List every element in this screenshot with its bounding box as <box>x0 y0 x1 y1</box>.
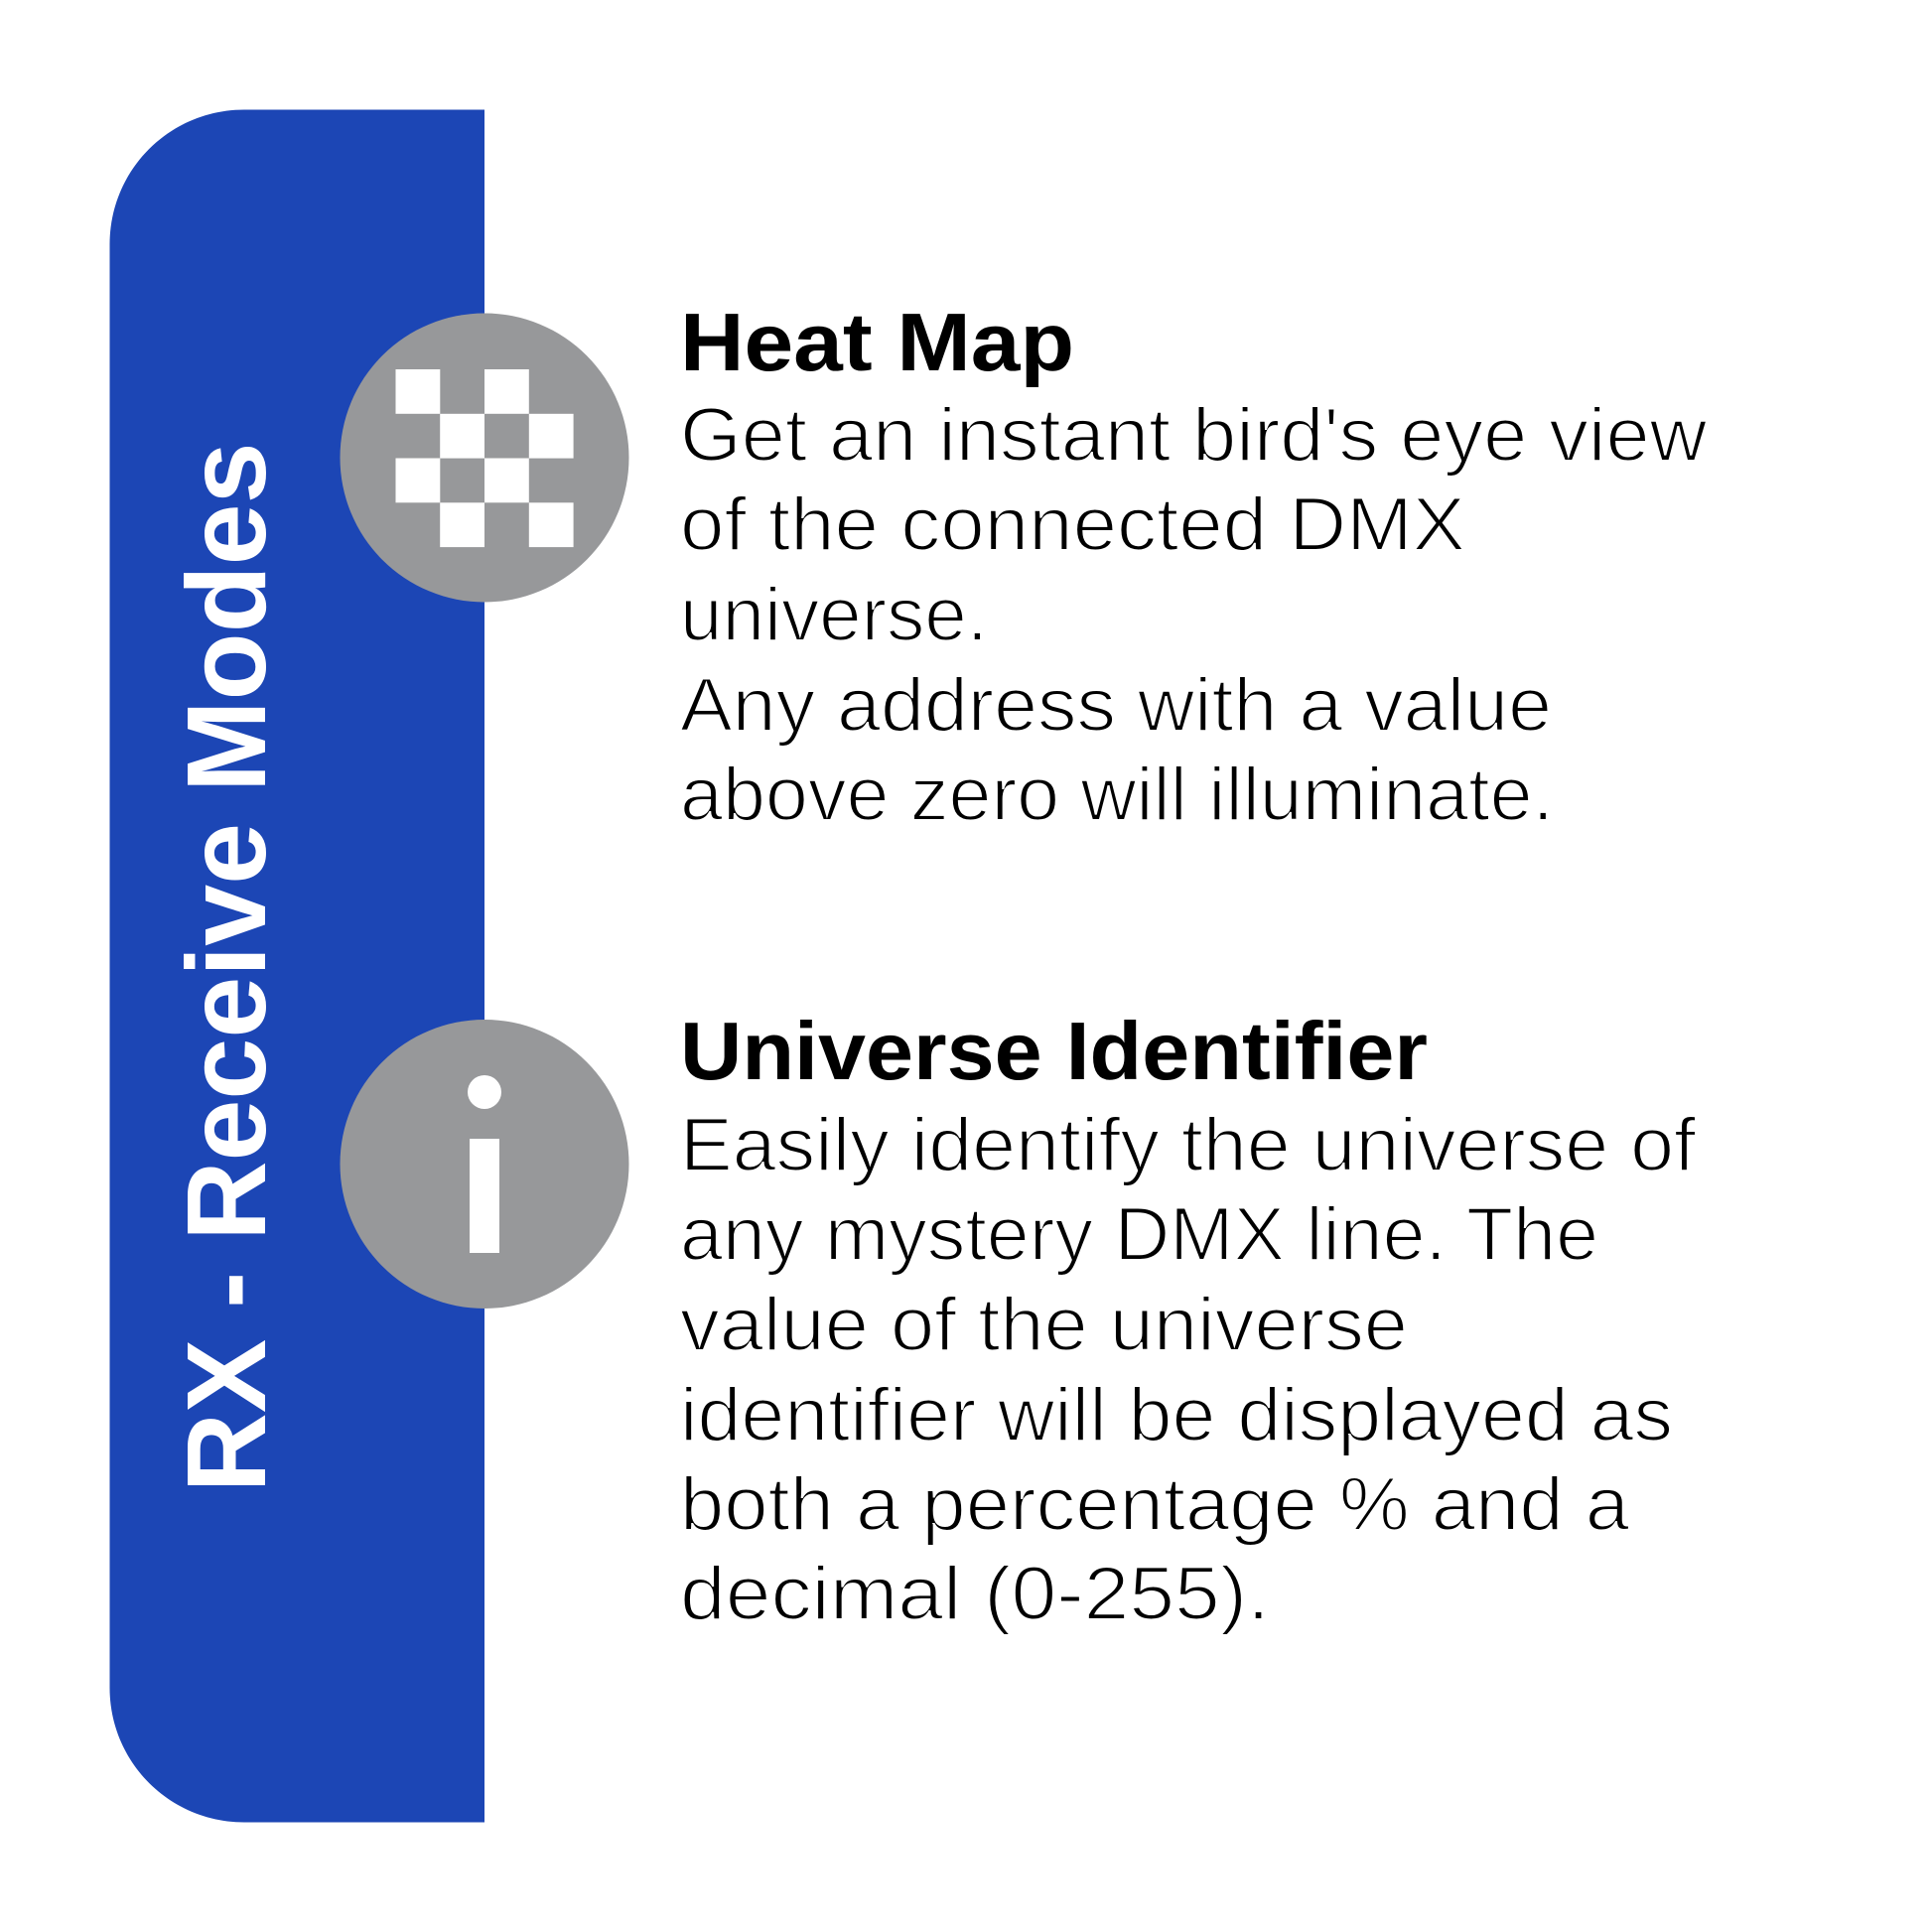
heading: Heat Map: Heat Map <box>680 296 1074 388</box>
icon: heat map <box>340 314 629 602</box>
text block: Heat Map description: universe. <box>680 573 988 657</box>
text block: Heat Map description: of the connected DMX <box>680 483 1465 567</box>
side band title: RX - Receive Modes <box>164 443 289 1493</box>
text block: Universe Identifier description: Easily identify the universe of <box>680 1103 1697 1187</box>
text block: Heat Map description: Any address with a value <box>680 663 1552 748</box>
text block: Universe Identifier description: identifier will be displayed as <box>680 1373 1673 1457</box>
text block: Heat Map description <box>680 393 1708 837</box>
icon: information <box>340 1020 629 1309</box>
text block: Universe Identifier description: both a percentage % and a <box>680 1462 1630 1547</box>
text block: Universe Identifier description: decimal (0-255). <box>680 1552 1270 1636</box>
text block: Universe Identifier description <box>680 1103 1697 1636</box>
panel: blue side band <box>109 109 484 1823</box>
text block: Universe Identifier description: value of the universe <box>680 1283 1408 1367</box>
heading: Universe Identifier: Universe Identifier <box>680 1005 1428 1097</box>
text block: Universe Identifier description: any mystery DMX line. The <box>680 1192 1598 1277</box>
text block: Heat Map description: above zero will illuminate. <box>680 753 1554 837</box>
text block: Heat Map description: Get an instant bird's eye view <box>680 393 1708 478</box>
